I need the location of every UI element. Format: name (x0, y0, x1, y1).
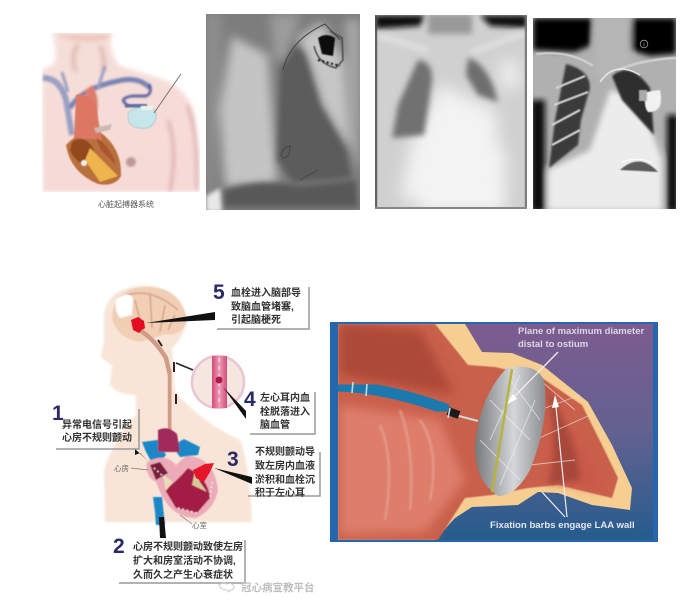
occluder device (475, 366, 545, 496)
pacemaker device (314, 31, 343, 68)
panel: stroke pathway diagram (52, 281, 320, 594)
delivery catheter (338, 386, 448, 410)
pacemaker device (639, 90, 661, 112)
head and body silhouette (101, 286, 252, 522)
callout 1: 异常电信号引起 (62, 418, 132, 431)
artery from heart to brain (141, 331, 170, 435)
label: atrium (114, 463, 148, 473)
clot in brain (131, 317, 145, 333)
barbs label: Fixation barbs engage LAA wall (490, 520, 635, 531)
brain (112, 287, 187, 342)
callout 1 (52, 402, 139, 449)
magnified vessel (176, 356, 244, 408)
caption: 心脏起搏器系统 (98, 199, 154, 209)
callout 3: 不规则颤动导 (255, 445, 315, 458)
panel: chest x-ray with dual-chamber pacemaker (531, 18, 678, 212)
callout 3: 积于左心耳 (255, 486, 305, 499)
atrium tissue (338, 324, 618, 540)
callout 2: 2 (113, 535, 125, 558)
panel: chest x-ray with dual-chamber pacemaker: i (643, 42, 645, 48)
panel: pacemaker system illustration (42, 33, 199, 209)
callout 3 (227, 445, 320, 499)
blue frame (330, 322, 658, 542)
label: ventricle: 心室 (192, 520, 207, 530)
callout 1: 1 (52, 402, 64, 425)
purple background (436, 324, 653, 540)
panel: chest x-ray, enlarged heart (375, 14, 527, 210)
pointer line (154, 74, 181, 113)
atrial wall (338, 324, 632, 540)
callout 5: 5 (213, 281, 225, 304)
heart silhouette (277, 45, 352, 183)
callout 4: 左心耳内血 (260, 391, 310, 404)
lung fields (392, 58, 498, 138)
lung fields (549, 64, 654, 168)
callout 2 (113, 535, 245, 583)
callout 4: 脑血管 (260, 418, 290, 431)
callout 3: 淤积和血栓沉 (255, 473, 315, 486)
torso and shoulder (42, 33, 199, 192)
panel: left atrial appendage occluder (330, 322, 658, 542)
callout 1: 心房不规则颤动 (62, 431, 132, 444)
label: ventricle (180, 515, 207, 530)
callout 4: 栓脱落进入 (260, 405, 310, 418)
callout 5: 引起脑梗死 (231, 313, 281, 326)
callout 2: 心房不规则颤动致使左房 (133, 540, 243, 553)
plane of maximum diameter line (492, 369, 512, 492)
implanted pulse generator (125, 104, 156, 128)
label: atrium: 心房 (114, 463, 129, 473)
thrombus in left atrial appendage (193, 463, 214, 482)
callout pointers (135, 312, 252, 538)
callout 5: 血栓进入脑部导 (231, 286, 301, 299)
callout 5 (213, 281, 309, 329)
callout 4 (244, 388, 315, 434)
panel: chest x-ray with pacemaker, lateral view (206, 14, 360, 212)
plane label: Plane of maximum diameter (518, 326, 644, 337)
callout 2: 扩大和房室活动不协调, (133, 554, 236, 567)
lungs (206, 14, 360, 195)
callout 3: 致左房内血液 (255, 459, 315, 472)
arrows (508, 352, 558, 403)
callout 5: 致脑血管堵塞, (231, 300, 294, 313)
plane label: distal to ostium (518, 339, 588, 350)
heart cutaway (66, 94, 121, 185)
veins and lead (43, 66, 150, 135)
callout 4: 4 (244, 388, 256, 411)
watermark: 冠心病宣教平台 (241, 581, 314, 594)
fixation barbs (530, 380, 590, 465)
callout 2: 久而久之产生心衰症状 (133, 568, 233, 581)
heart (142, 428, 218, 525)
callout 3: 3 (227, 448, 239, 471)
